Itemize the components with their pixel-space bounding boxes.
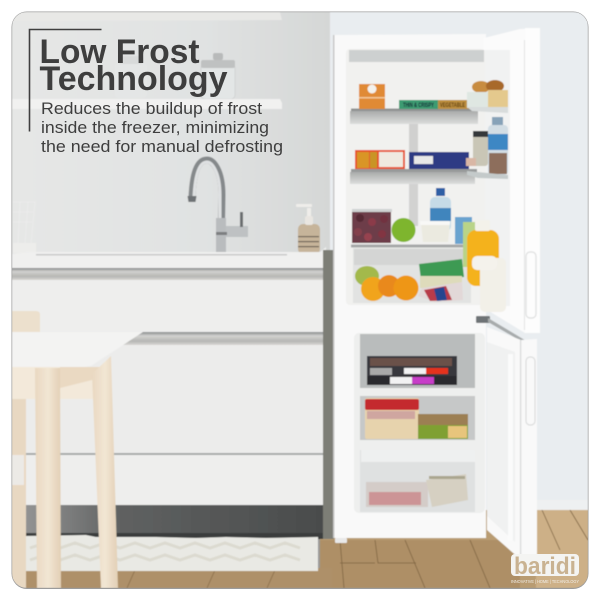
description text: the need for manual defrosting — [41, 137, 283, 156]
title: Technology — [40, 60, 228, 98]
cabinet rail middle — [124, 333, 324, 346]
lime — [355, 266, 379, 286]
door water bottle — [488, 117, 508, 175]
freezer drawer three — [360, 450, 475, 512]
cabinet rail top — [12, 268, 323, 280]
drawer three — [12, 455, 323, 505]
door shelf two — [467, 171, 508, 179]
faucet — [188, 160, 248, 256]
dish rack — [13, 202, 36, 253]
glass jar left — [120, 56, 141, 64]
chair — [12, 311, 102, 588]
description text: inside the freezer, minimizing — [41, 118, 269, 137]
description text: Reduces the buildup of frost — [41, 99, 262, 118]
door jar — [466, 131, 488, 166]
milk bottle — [472, 256, 506, 312]
oranges — [361, 275, 418, 301]
cabinet gap — [323, 250, 334, 539]
shelf one — [351, 108, 481, 111]
drawer two — [12, 345, 323, 454]
counter top — [12, 247, 326, 268]
door pastries — [467, 80, 508, 108]
lower door — [487, 327, 537, 560]
shelf two — [351, 169, 477, 172]
freezer drawer one — [360, 334, 475, 388]
upper door — [484, 28, 540, 333]
shelf three — [351, 244, 473, 248]
description text — [41, 99, 283, 156]
vegetable bag — [418, 259, 464, 302]
plinth — [27, 504, 324, 534]
fridge foot — [335, 538, 347, 543]
table leg right — [92, 356, 118, 588]
door hinge — [476, 316, 528, 344]
yogurt tub — [420, 221, 450, 242]
green apple — [392, 218, 416, 242]
water bottle — [430, 188, 451, 231]
freezer compartment — [354, 333, 485, 513]
title — [40, 33, 228, 98]
brand logo: baridi — [514, 553, 576, 580]
fridge — [333, 28, 540, 560]
lower shelf — [12, 99, 282, 109]
grape container — [352, 209, 392, 243]
right wall — [330, 12, 588, 512]
wood floor — [12, 510, 588, 588]
upper compartment — [346, 49, 485, 305]
rug — [26, 535, 318, 571]
wall — [12, 12, 334, 262]
freezer drawer two — [360, 396, 475, 440]
crisper drawer — [353, 248, 471, 303]
juice bottle — [463, 220, 499, 286]
title: Low Frost — [40, 33, 200, 71]
table leg left — [35, 368, 61, 588]
table — [12, 332, 143, 588]
glass jar right — [200, 52, 236, 68]
orange carton — [359, 84, 385, 109]
blue carton — [455, 217, 472, 244]
upper shelf — [207, 12, 282, 20]
blue box — [409, 152, 469, 169]
soap bottle — [296, 204, 320, 254]
skirting board — [536, 500, 588, 510]
green and brown cracker box: VEGETABLE — [440, 103, 465, 109]
logo tagline: INNOVATIVE | HOME | TECHNOLOGY — [511, 579, 579, 584]
title bracket — [30, 30, 102, 132]
green and brown cracker box — [399, 100, 470, 109]
door shelf one — [467, 107, 508, 113]
drawer one — [12, 280, 323, 332]
fridge body — [334, 34, 486, 538]
green and brown cracker box: THIN & CRISPY — [403, 103, 434, 109]
snack boxes — [355, 150, 405, 169]
